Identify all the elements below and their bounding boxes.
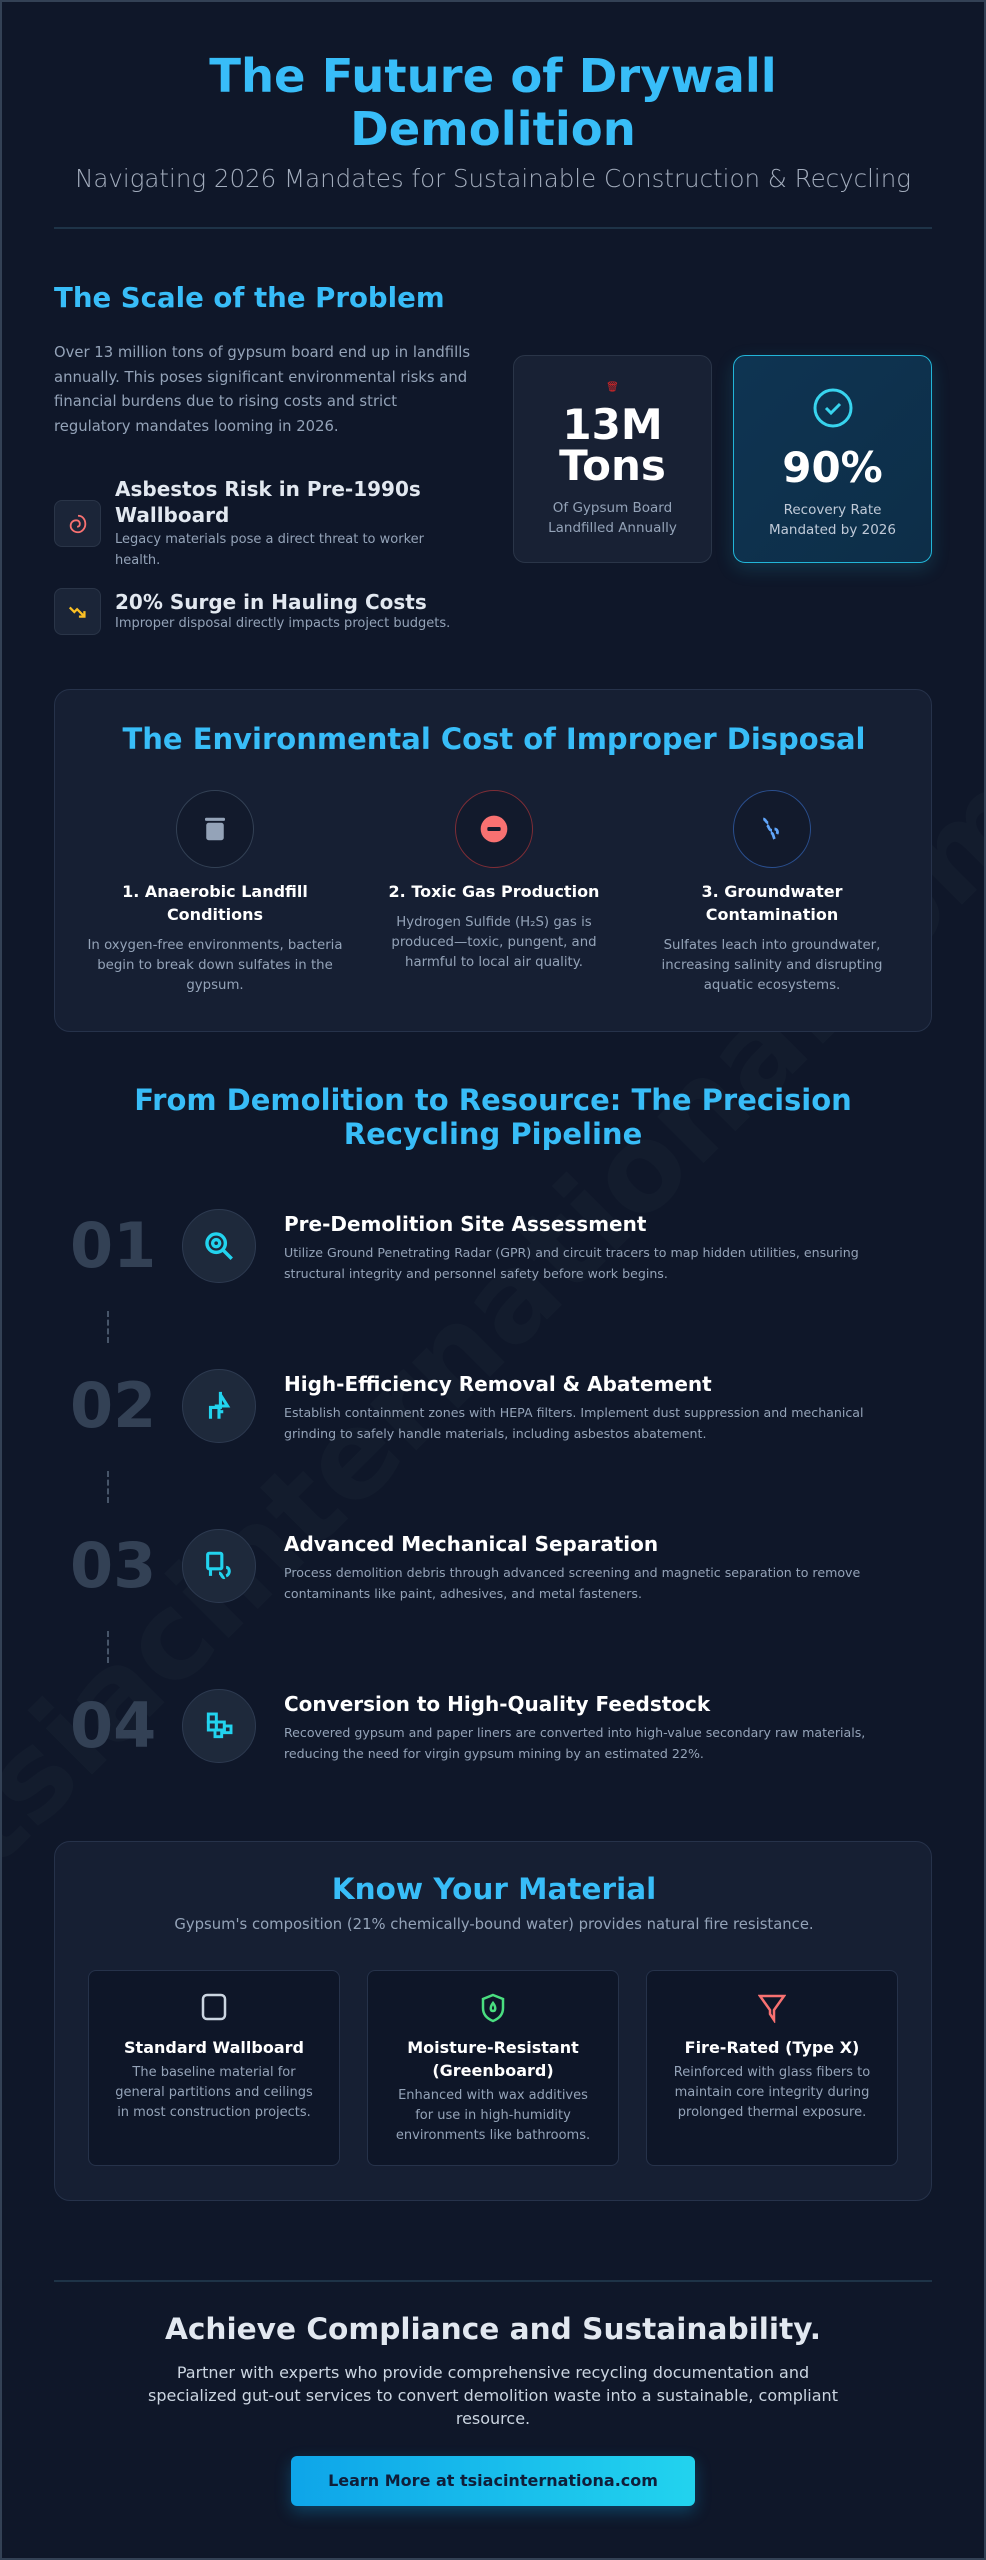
stat label: Of Gypsum Board	[553, 500, 672, 516]
title: Demolition	[350, 102, 636, 156]
item: toxic gas	[389, 790, 599, 970]
stat value: Tons	[559, 441, 666, 490]
stat label: Recovery Rate	[784, 502, 881, 518]
item: asbestos risk	[54, 477, 424, 568]
icon: trend down	[54, 588, 101, 635]
desc: Enhanced with wax additives for use in high-humidity environments like bathrooms.	[396, 2088, 590, 2143]
text: title: Contamination	[706, 905, 838, 924]
icon: water	[733, 790, 811, 868]
heading: Know Your Material	[332, 1872, 656, 1906]
stat label	[548, 500, 677, 536]
icon: blocks	[182, 1689, 256, 1763]
stat label	[769, 502, 896, 538]
desc: Reinforced with glass fibers to maintain core integrity during prolonged thermal exposure.	[674, 2065, 870, 2120]
text: title: 3. Groundwater	[702, 882, 842, 901]
panel: know your material	[54, 1841, 932, 2201]
stat card: 13M tons	[513, 355, 712, 563]
number: 02	[70, 1369, 156, 1442]
text: compliance paragraph: Partner with experts who provide comprehensive recycling documentation and specialized gut-out services to convert demolition waste into a sustainable, compliant resource.	[148, 2363, 838, 2428]
desc: Establish containment zones with HEPA filters. Implement dust suppression and mechanical grinding to safely handle materials, including asbestos abatement.	[284, 1405, 864, 1441]
icon: board	[202, 1994, 226, 2020]
icon: worker	[182, 1369, 256, 1443]
connectors	[107, 1311, 109, 1343]
heading: compliance: Achieve Compliance and Sustainability.	[165, 2312, 821, 2346]
desc: Utilize Ground Penetrating Radar (GPR) and circuit tracers to map hidden utilities, ensuring structural integrity and personnel safety before work begins.	[284, 1245, 859, 1281]
text: asbestos title: Asbestos Risk in Pre-1990s Wallboard	[115, 477, 421, 527]
number: 04	[70, 1689, 156, 1762]
step 02	[70, 1369, 864, 1443]
text: title: 1. Anaerobic Landfill	[122, 882, 308, 901]
text: problem paragraph: Over 13 million tons of gypsum board end up in landfills annually. This poses significant environmental risks and financial burdens due to rising costs and strict regulatory mandates looming in 2026.	[54, 344, 470, 434]
text: desc: Sulfates leach into groundwater, increasing salinity and disrupting aquatic ecosystems.	[662, 938, 882, 993]
stat value: 13M	[562, 400, 663, 449]
item: groundwater	[662, 790, 882, 993]
title: Pre-Demolition Site Assessment	[284, 1212, 646, 1236]
title: High-Efficiency Removal & Abatement	[284, 1372, 712, 1396]
stat label: Landfilled Annually	[548, 520, 677, 536]
title: Moisture-Resistant	[407, 2038, 579, 2057]
step 04	[70, 1689, 865, 1763]
step 03	[70, 1529, 860, 1603]
item: hauling costs	[54, 588, 450, 635]
card: moisture	[367, 1970, 619, 2166]
icon: check circle	[814, 388, 852, 428]
title: Fire-Rated (Type X)	[685, 2038, 859, 2057]
card: standard	[88, 1970, 340, 2166]
item: anaerobic	[88, 790, 342, 993]
icon: asbestos	[54, 500, 101, 547]
title: The Future of Drywall	[209, 49, 777, 103]
button: learn more: Learn More at tsiacinternationa.com	[328, 2471, 658, 2490]
desc: Process demolition debris through advanced screening and magnetic separation to remove contaminants like paint, adhesives, and metal fasteners.	[284, 1565, 860, 1601]
icon: shield	[482, 1994, 504, 2022]
card: fire-rated	[646, 1970, 898, 2166]
text: hauling desc: Improper disposal directly impacts project budgets.	[115, 616, 450, 631]
title	[407, 2038, 579, 2080]
text: title	[702, 882, 842, 924]
text: title	[122, 882, 308, 924]
stat label: Mandated by 2026	[769, 522, 896, 538]
title: Advanced Mechanical Separation	[284, 1532, 658, 1556]
text: desc: Hydrogen Sulfide (H₂S) gas is produced—toxic, pungent, and harmful to local air quality.	[391, 915, 597, 970]
heading: pipeline: Recycling Pipeline	[344, 1117, 642, 1151]
desc: The baseline material for general partitions and ceilings in most construction projects.	[115, 2065, 313, 2120]
text: asbestos desc: Legacy materials pose a direct threat to worker health.	[115, 532, 424, 568]
heading: pipeline	[134, 1083, 852, 1151]
stat value: 90%	[782, 443, 883, 492]
heading: pipeline: From Demolition to Resource: The Precision	[134, 1083, 852, 1117]
icon: separator	[182, 1529, 256, 1603]
heading: scale of the problem: The Scale of the Problem	[54, 281, 445, 314]
number: 03	[70, 1529, 156, 1602]
text: title: 2. Toxic Gas Production	[389, 882, 599, 901]
icon: gas	[455, 790, 533, 868]
icon: trash: 🗑	[606, 382, 619, 393]
panel: environmental cost	[54, 689, 932, 1032]
title	[209, 49, 777, 156]
stat value	[559, 400, 666, 490]
title: Standard Wallboard	[124, 2038, 304, 2057]
button: learn more	[291, 2456, 695, 2506]
title: Conversion to High-Quality Feedstock	[284, 1692, 710, 1716]
icon: search	[182, 1209, 256, 1283]
icon: funnel	[758, 1994, 786, 2023]
number: 01	[70, 1209, 156, 1282]
title: (Greenboard)	[432, 2061, 554, 2080]
heading: environmental cost: The Environmental Cost of Improper Disposal	[122, 722, 865, 756]
subtitle: Navigating 2026 Mandates for Sustainable Construction & Recycling	[75, 164, 911, 193]
text: desc: In oxygen-free environments, bacteria begin to break down sulfates in the gypsum.	[88, 938, 342, 993]
step 01	[70, 1209, 859, 1283]
text: hauling title: 20% Surge in Hauling Costs	[115, 590, 427, 614]
stat card: 90%	[733, 355, 932, 563]
subtext: Gypsum's composition (21% chemically-bound water) provides natural fire resistance.	[174, 1916, 814, 1933]
desc: Recovered gypsum and paper liners are converted into high-value secondary raw materials, reducing the need for virgin gypsum mining by an estimated 22%.	[284, 1725, 865, 1761]
icon: landfill	[176, 790, 254, 868]
text: title: Conditions	[167, 905, 263, 924]
